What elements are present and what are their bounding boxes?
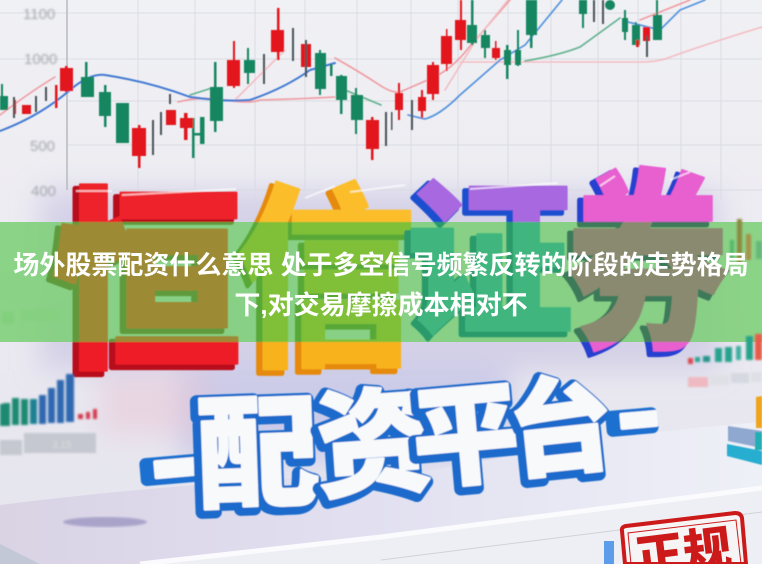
left bar chart [0, 374, 97, 426]
logo character 证: 证 [406, 127, 574, 370]
logo character 恒: 恒 [46, 130, 238, 413]
shelf left corner [0, 544, 40, 564]
bar chart on right behind band [730, 219, 762, 263]
logo character 券: 券 [561, 113, 725, 395]
shelf front face [140, 490, 762, 564]
logo character 券: 券 [566, 109, 730, 391]
caption text: 场外股票配资什么意思 处于多空信号频繁反转的阶段的走势格局 [13, 250, 749, 280]
left label boxes: 3.15 [52, 440, 72, 451]
character 资: 资 [307, 350, 435, 526]
right bar chart [688, 334, 762, 364]
axis labels: 1100 [23, 6, 55, 23]
moving average lines [0, 0, 762, 131]
axis labels [23, 6, 57, 200]
soft logo shadow [40, 190, 720, 460]
dark candle wicks [13, 0, 648, 155]
logo: 配资平台 [139, 339, 659, 538]
shelf shadow [63, 517, 147, 527]
logo: 恒信证券 [46, 109, 730, 413]
top-edge highlights [76, 172, 690, 198]
axis labels: 500 [30, 138, 55, 155]
stamp frame [622, 513, 746, 564]
character 平: 平 [402, 346, 526, 515]
right dash [605, 407, 659, 437]
right label boxes [688, 372, 762, 387]
axis labels: 1000 [24, 51, 57, 68]
red candles [13, 0, 650, 168]
blue marker [604, 541, 614, 564]
shelf seam [381, 512, 762, 560]
left dash [139, 453, 207, 487]
character 配: 配 [191, 357, 319, 538]
caption text [13, 250, 749, 320]
caption band [0, 222, 762, 342]
candlestick chart [0, 0, 762, 168]
stacked blocks [727, 396, 762, 465]
character 资: 资 [310, 347, 437, 523]
logo character 恒: 恒 [51, 126, 243, 409]
shelf front edge highlight [140, 488, 762, 564]
character 配: 配 [194, 354, 322, 535]
chart y axis [66, 0, 68, 190]
left label boxes [0, 433, 96, 455]
logo character 信: 信 [236, 121, 416, 408]
character 平: 平 [405, 342, 528, 511]
green candles [0, 0, 662, 158]
logo character 信: 信 [231, 125, 411, 412]
character 台: 台 [500, 339, 620, 500]
ghost panel behind band [0, 272, 70, 324]
axis labels: 400 [31, 183, 56, 200]
chart grid [0, 0, 762, 200]
shelf surface [0, 422, 762, 564]
caption text: 下,对交易摩擦成本相对不 [234, 290, 528, 320]
character 台: 台 [498, 342, 617, 503]
logo character 证: 证 [401, 131, 569, 374]
